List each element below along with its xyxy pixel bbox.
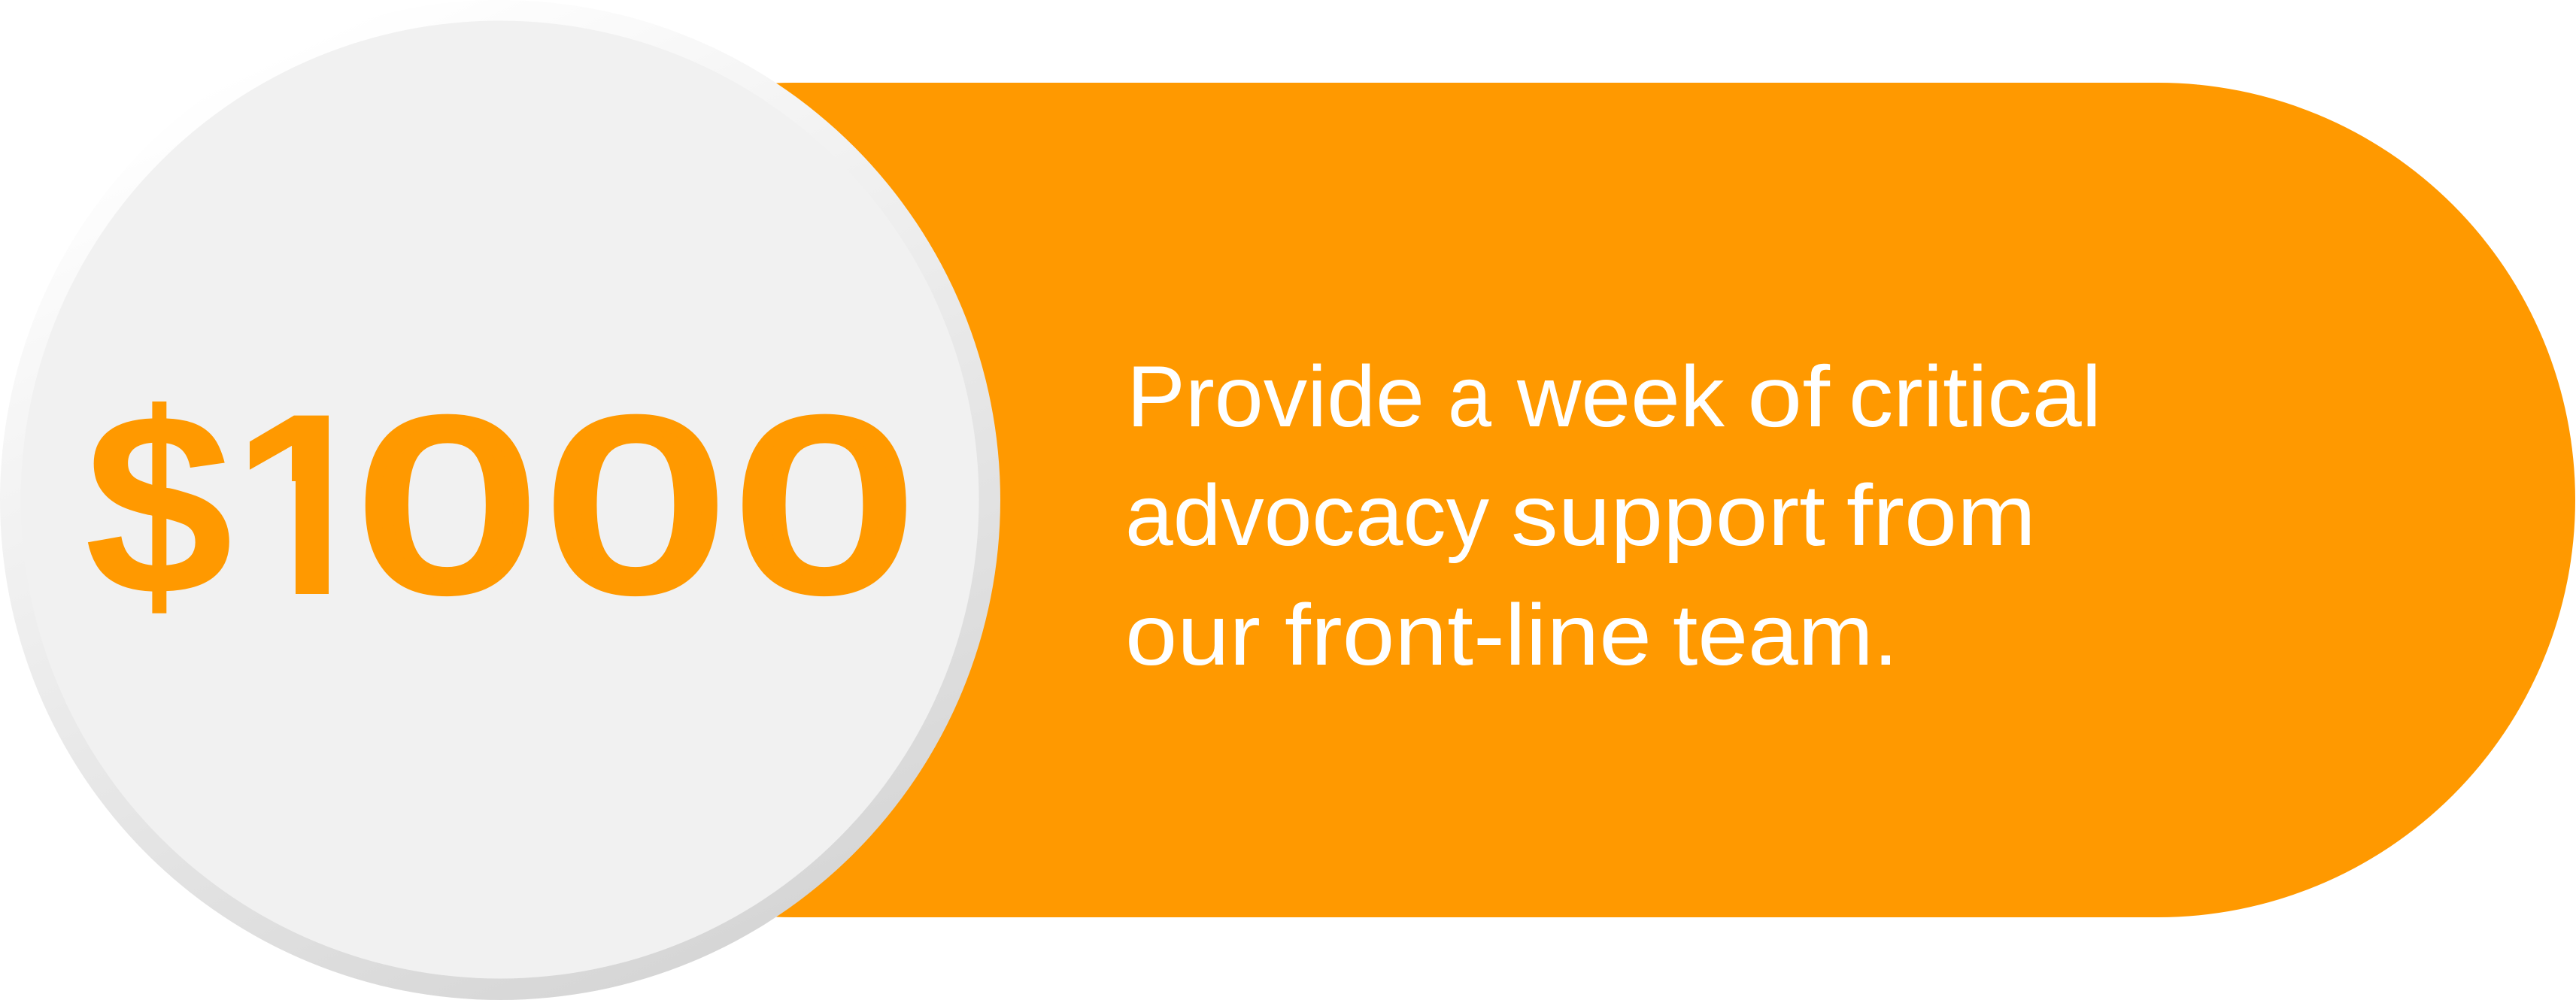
amount: $1000: 1 [225,359,384,649]
description text [1125,349,2101,683]
line 3: team. [1673,587,1898,683]
line 2: support [1511,468,1825,564]
badge inner disc [21,21,979,979]
line 1: of [1747,349,1831,445]
line 2: from [1846,468,2036,564]
line 1: critical [1849,349,2101,445]
line 1: Provide [1127,349,1425,445]
panel: orange pill [376,83,2575,917]
amount: $1000: 0 [549,371,722,640]
line 1: a [1448,349,1491,445]
badge outer ring [0,0,1000,1000]
amount: $1000: 0 [361,371,533,640]
amount: $1000: $ [84,360,233,650]
circle badge [0,0,1000,1000]
line 3: our [1125,587,1261,683]
line 2: advocacy [1125,468,1489,564]
amount: $1000: 0 [738,371,911,640]
line 1: week [1516,349,1725,445]
amount: $1000 [87,402,906,614]
line 3: front-line [1285,587,1652,683]
